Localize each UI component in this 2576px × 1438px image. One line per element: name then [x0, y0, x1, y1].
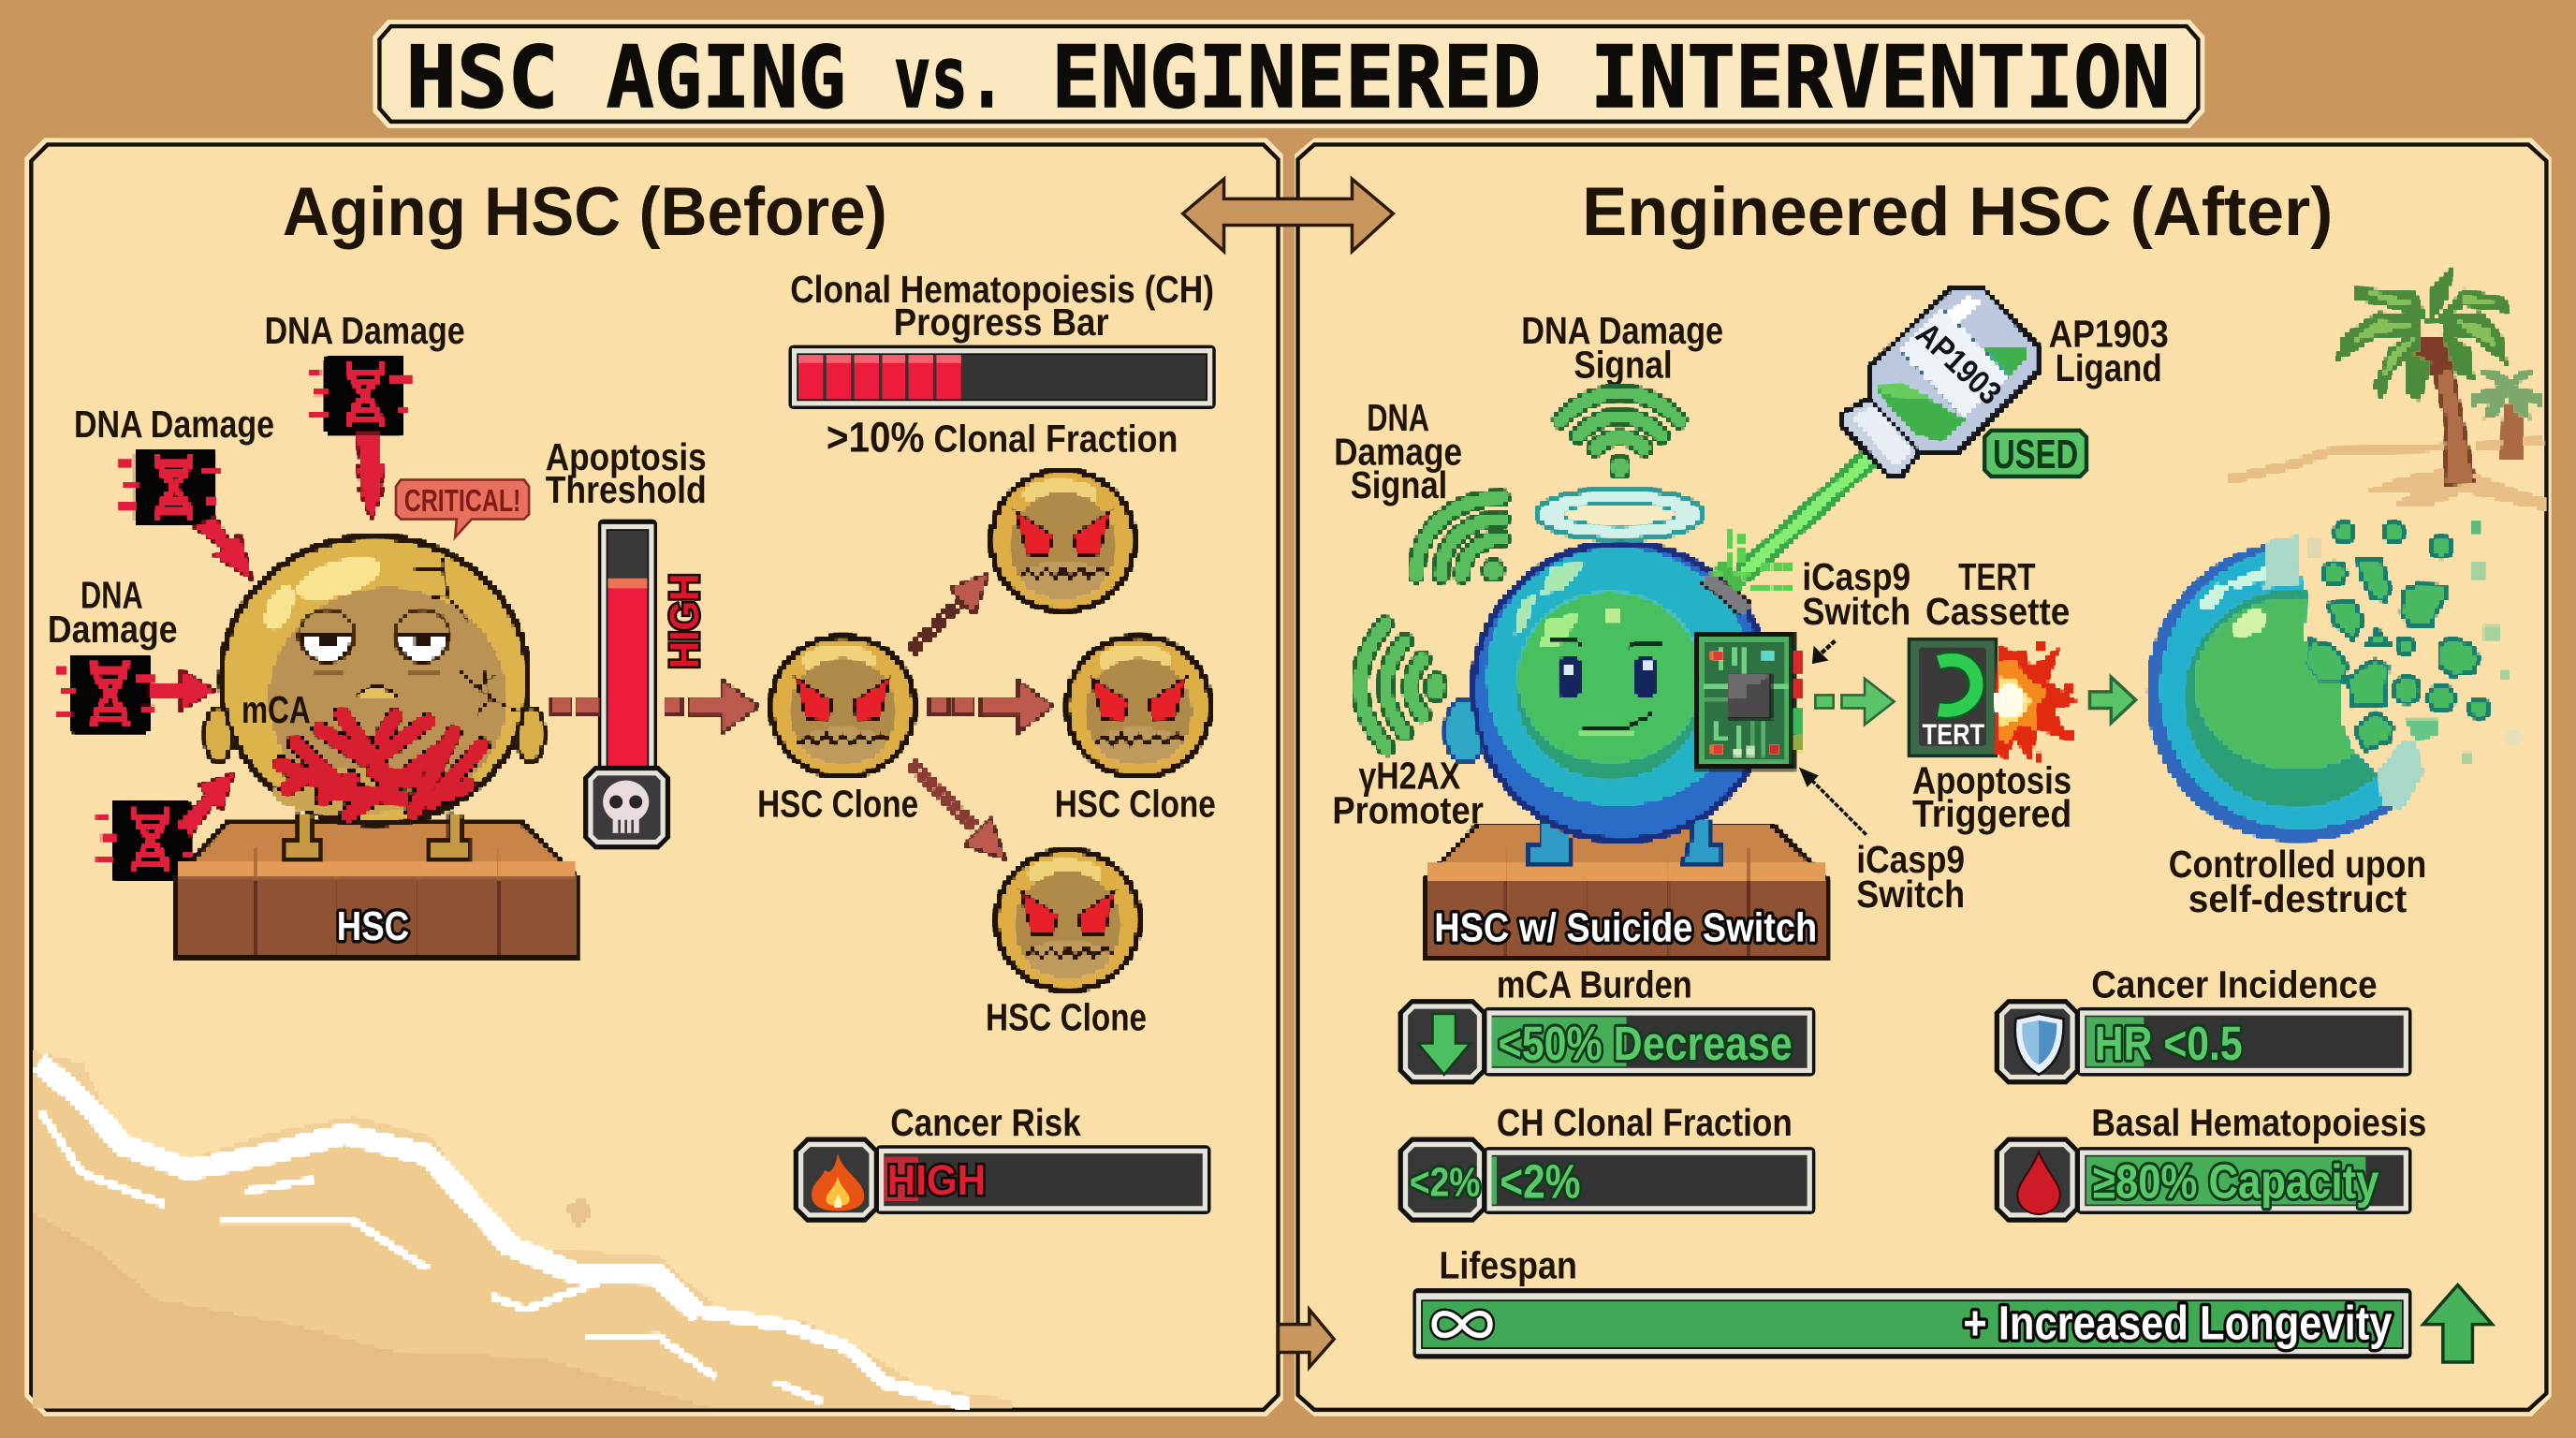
icon: signal left	[1416, 498, 1503, 580]
label: DNA left: DNA	[80, 573, 143, 616]
hsc clone: right	[1064, 634, 1212, 779]
label: DNA damage upper left: DNA Damage	[74, 403, 274, 446]
title text: AGING	[607, 27, 846, 127]
label: apoptosis triggered: Apoptosis	[1912, 759, 2071, 802]
icon: TERT cassette: TERT	[1922, 717, 1984, 751]
metric: basal hematopoiesis	[1995, 1137, 2411, 1223]
hsc clone: lower	[994, 848, 1142, 992]
metric: basal hematopoiesis: ≥80% Capacity	[2093, 1154, 2379, 1208]
icon: gamma H2AX signal	[1360, 624, 1445, 748]
gauge: apoptosis thermometer	[583, 520, 670, 849]
label: gamma H2AX: γH2AX	[1358, 754, 1460, 797]
circuit: iCasp9 chip	[1697, 634, 1802, 768]
heading: Engineered HSC: Engineered HSC (After)	[1582, 172, 2333, 250]
label: switch lower: Switch	[1856, 873, 1965, 916]
label: DNA damage signal top: DNA Damage	[1521, 309, 1723, 352]
badge: used: USED	[1993, 432, 2078, 477]
metric: lifespan: + Increased Longevity	[1963, 1296, 2393, 1349]
label: signal right: Signal	[1351, 463, 1447, 506]
label: cassette: Cassette	[1925, 590, 2070, 633]
label: TERT: TERT	[1958, 555, 2036, 598]
label: CH clonal fraction: CH Clonal Fraction	[1497, 1101, 1793, 1144]
icon: DNA damage top	[311, 357, 411, 518]
arrow: to upper clone	[912, 575, 988, 651]
arrow: to chip lower	[1799, 768, 1866, 835]
label: switch upper: Switch	[1802, 590, 1910, 633]
arrow: to self destruct	[2089, 677, 2136, 723]
icon: signal top	[1560, 393, 1679, 477]
metric: lifespan	[1412, 1288, 2411, 1358]
label: cancer incidence: Cancer Incidence	[2091, 962, 2378, 1005]
title text	[406, 27, 2170, 127]
label: basal hematopoiesis: Basal Hematopoiesis	[2091, 1101, 2426, 1144]
platform: HSC	[174, 822, 578, 960]
platform: engineered	[1425, 823, 1828, 961]
label: clone lower: HSC Clone	[986, 995, 1147, 1038]
label: clonal fraction: >10% Clonal Fraction	[827, 414, 1178, 462]
label: progress bar: Progress Bar	[894, 301, 1109, 344]
label: HSC platform: HSC	[337, 903, 409, 949]
arrow: thermometer to clone	[666, 682, 757, 731]
palm trees and dune	[2228, 268, 2545, 509]
label: signal top: Signal	[1573, 344, 1673, 387]
arrow: chip to TERT	[1815, 679, 1895, 725]
character: engineered HSC cell	[1445, 490, 1769, 862]
arrow: cell to thermometer	[552, 698, 598, 713]
bottle label: AP1903	[1909, 315, 2008, 412]
label: mCA burden: mCA Burden	[1497, 962, 1692, 1005]
beam: AP1903 ligand	[1712, 450, 1878, 588]
arrow: to lower clone	[912, 764, 1003, 858]
arrow: to chip upper	[1812, 640, 1835, 664]
callout: critical	[396, 479, 529, 537]
icon: blood drop	[2017, 1152, 2060, 1214]
divider: double arrow	[1183, 179, 1393, 252]
metric: cancer risk: HIGH	[887, 1156, 986, 1204]
callout: critical: CRITICAL!	[404, 484, 520, 519]
label: AP1903 ligand: AP1903	[2049, 312, 2169, 355]
metric: mCA burden: <50% Decrease	[1499, 1017, 1793, 1070]
icon: explosion	[1995, 640, 2076, 761]
label: promoter: Promoter	[1332, 788, 1484, 831]
shell and nucleus	[2145, 534, 2393, 844]
label: clone left: HSC Clone	[757, 782, 918, 825]
label: damage right: Damage	[1334, 431, 1462, 474]
title banner	[373, 20, 2204, 128]
hsc clone: upper	[989, 468, 1137, 613]
label: clone right: HSC Clone	[1055, 782, 1216, 825]
label: ligand: Ligand	[2056, 346, 2162, 389]
title text: vs.	[894, 27, 1005, 127]
icon: shield	[2015, 1014, 2064, 1075]
label: cancer risk: Cancer Risk	[890, 1101, 1081, 1144]
panel: engineered HSC	[1295, 138, 2552, 1416]
label: mCA: mCA	[242, 688, 311, 731]
skull icon	[583, 766, 670, 849]
icon: TERT cassette	[1909, 639, 1996, 756]
metric: CH clonal fraction	[1398, 1137, 1815, 1223]
divider: small arrow	[1278, 1310, 1334, 1367]
icon: down arrow	[1418, 1014, 1471, 1075]
icon: infinity	[1434, 1313, 1490, 1335]
arrow: to right clone	[929, 682, 1051, 731]
label: controlled upon: Controlled upon	[2169, 843, 2426, 886]
label: DNA right: DNA	[1367, 396, 1429, 439]
metric: mCA burden	[1398, 999, 1815, 1084]
bottle: AP1903	[1843, 287, 2037, 475]
panel: aging HSC	[24, 138, 1283, 1416]
icon: DNA damage upper left	[120, 448, 252, 579]
switch cap	[1705, 577, 1747, 611]
icon: up arrow	[2423, 1284, 2492, 1362]
character: self-destructing cell	[2147, 522, 2520, 842]
title text: ENGINEERED	[1051, 27, 1541, 127]
title text: INTERVENTION	[1590, 27, 2170, 127]
hsc clone: left	[768, 634, 916, 779]
fragments	[2306, 523, 2488, 749]
metric: CH clonal fraction: <2%	[1410, 1160, 1480, 1206]
icon: flame	[812, 1153, 864, 1211]
sand and wave scene	[35, 1051, 1010, 1406]
metric: cancer incidence: HR <0.5	[2095, 1017, 2243, 1070]
label: self destruct: self-destruct	[2188, 877, 2407, 920]
title text: HSC	[406, 27, 559, 127]
icon: DNA damage left	[56, 655, 213, 733]
chart: CH progress bar	[788, 345, 1216, 409]
character: aging HSC cell	[205, 537, 544, 858]
label: clonal hematopoiesis: Clonal Hematopoiesis (CH)	[790, 268, 1214, 311]
icon: DNA damage lower	[97, 774, 233, 879]
label: HIGH vertical: HIGH	[662, 574, 708, 668]
label: DNA damage top: DNA Damage	[265, 309, 465, 352]
heading: Aging HSC: Aging HSC (Before)	[283, 172, 887, 250]
label: threshold: Threshold	[546, 468, 707, 511]
metric: cancer risk	[794, 1137, 1211, 1223]
label: damage left: Damage	[48, 608, 178, 651]
label: triggered: Triggered	[1912, 792, 2071, 835]
metric: cancer incidence	[1995, 999, 2411, 1084]
label: HSC with suicide switch: HSC w/ Suicide Switch	[1434, 905, 1817, 951]
label: iCasp9 switch upper: iCasp9	[1802, 555, 1910, 598]
label: iCasp9 switch lower: iCasp9	[1856, 838, 1965, 881]
label: apoptosis threshold: Apoptosis	[546, 435, 707, 478]
halo	[1538, 490, 1702, 539]
label: lifespan: Lifespan	[1439, 1243, 1577, 1286]
metric: CH clonal fraction: <2%	[1500, 1154, 1580, 1208]
